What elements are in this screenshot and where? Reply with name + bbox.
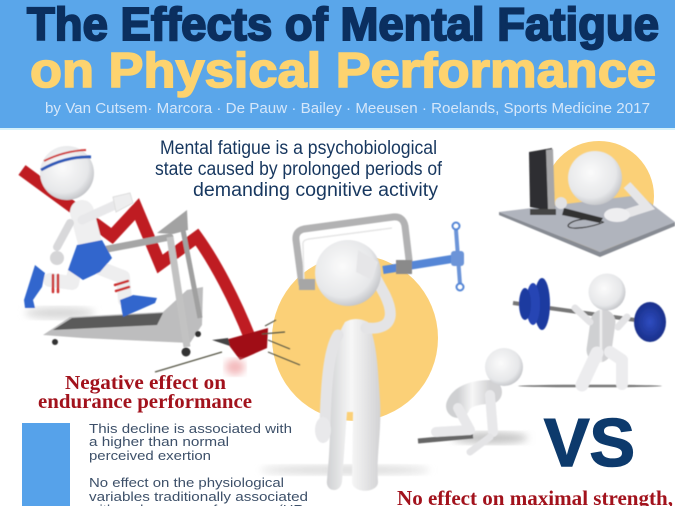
endurance findings text — [88, 422, 308, 506]
endurance findings text: perceived exertion — [89, 449, 211, 463]
definition text — [155, 138, 443, 201]
runner figure — [24, 193, 157, 317]
header band — [0, 0, 675, 130]
heading: endurance: endurance performance — [38, 392, 252, 413]
shoes and socks — [120, 295, 157, 317]
clamp frame — [296, 217, 410, 285]
headband — [41, 150, 91, 170]
definition text: state caused by prolonged periods of — [155, 159, 443, 180]
icon: runner on treadmill with falling arrow — [22, 146, 300, 375]
endurance findings text: This decline is associated with — [89, 422, 292, 436]
blue side block — [22, 423, 70, 506]
icon: figure with clamp on head — [260, 217, 464, 491]
endurance findings text: variables traditionally associated — [89, 490, 308, 504]
heading: endurance — [38, 373, 252, 413]
endurance findings text: a higher than normal — [89, 435, 229, 449]
figure body — [327, 319, 380, 491]
shorts — [68, 240, 112, 280]
endurance findings text: No effect on the physiological — [89, 476, 284, 490]
barbell — [513, 303, 650, 322]
monitor — [529, 148, 555, 212]
VS label: VS — [544, 405, 635, 481]
desk platform — [499, 195, 675, 252]
definition text: Mental fatigue is a psychobiological — [160, 138, 437, 159]
heading: endurance: Negative effect on — [65, 373, 226, 394]
head — [568, 151, 622, 205]
lifter body — [575, 308, 627, 385]
arms — [625, 185, 647, 214]
yellow circle: centre — [272, 255, 438, 421]
definition text: demanding cognitive activity — [193, 180, 439, 201]
icon: sprinter at start — [418, 348, 528, 452]
cable and keyboard — [562, 208, 603, 223]
icon: figure asleep at computer — [499, 148, 675, 257]
title line 2: on Physical Performance — [30, 44, 656, 98]
arrow head and cracks — [155, 320, 300, 375]
icon: weightlifter — [513, 274, 666, 387]
red declining arrow — [22, 170, 250, 338]
yellow circle: top right — [544, 141, 654, 251]
treadmill — [43, 210, 203, 356]
clamp screw — [383, 222, 464, 290]
citation: by Van Cutsem· Marcora · De Pauw · Bailey · Meeusen · Roelands, Sports Medicine 2017 — [45, 101, 650, 117]
